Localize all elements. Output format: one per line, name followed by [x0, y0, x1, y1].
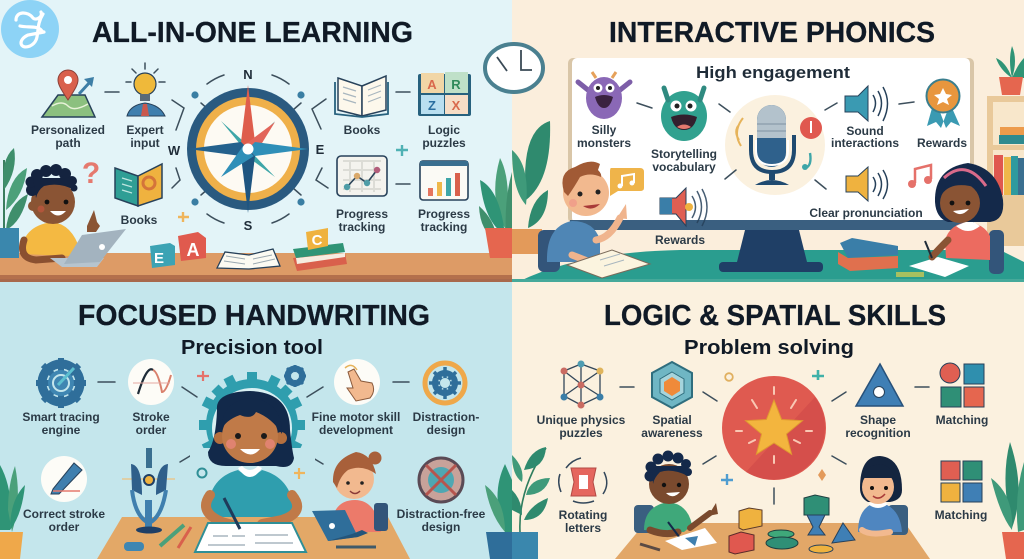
divider strip between rows — [0, 279, 1024, 282]
label: logic puzzles: puzzles — [422, 136, 466, 150]
block E: E — [154, 250, 164, 267]
label: silly monsters: Silly — [592, 123, 617, 137]
connector — [393, 381, 409, 383]
labels: progress tracking: tracking — [339, 220, 385, 234]
label: logic puzzles: Logic — [428, 123, 460, 137]
plant right — [479, 158, 512, 258]
subheading: Problem solving — [684, 337, 854, 359]
plant left — [0, 465, 25, 559]
icon: stroke order — [128, 359, 174, 405]
label: storytelling vocabulary: vocabulary — [652, 160, 716, 174]
icon: logic puzzle book: A — [427, 77, 437, 92]
icon: spatial hexagon — [652, 362, 692, 408]
title: FOCUSED HANDWRITING — [78, 300, 430, 332]
label: unique physics puzzles — [537, 413, 626, 440]
girl writing — [909, 163, 1004, 277]
title: LOGIC & SPATIAL SKILLS — [604, 300, 946, 332]
compass letters — [168, 67, 325, 233]
label: sound interactions: interactions — [831, 136, 899, 150]
label: stroke order — [132, 410, 170, 437]
label: expert input: input — [130, 136, 160, 150]
labels: progress tracking second: tracking — [421, 220, 467, 234]
label: storytelling vocabulary — [651, 147, 717, 174]
label: distraction design: design — [427, 423, 465, 437]
boy with book — [538, 162, 650, 278]
label: expert input: Expert — [126, 123, 164, 137]
book stack — [838, 238, 924, 277]
label: sound interactions: Sound — [846, 124, 884, 138]
icon: pencil circle — [41, 456, 87, 502]
label: rotating letters: Rotating — [559, 508, 607, 522]
connector — [620, 386, 634, 388]
block E — [150, 243, 175, 268]
title: ALL-IN-ONE LEARNING — [92, 17, 413, 49]
notebook table — [97, 517, 410, 559]
table — [615, 523, 930, 559]
bookshelf — [987, 96, 1024, 246]
icon: speaker clear pronunciation — [846, 167, 888, 201]
icon: puzzle matching — [940, 363, 984, 407]
open book on table — [217, 249, 280, 269]
compass letters: W — [168, 143, 181, 158]
microphone centre — [725, 95, 825, 195]
star badge — [722, 376, 826, 480]
label: correct stroke order — [23, 507, 105, 534]
compass letters: N — [243, 67, 253, 82]
girl writing — [206, 391, 297, 526]
labels: progress tracking — [336, 207, 388, 234]
panel: logic and spatial skills — [512, 282, 1024, 559]
label: unique physics puzzles: Unique physics — [537, 413, 626, 427]
pencils and eraser — [124, 525, 191, 551]
label: smart tracing engine: Smart tracing — [22, 410, 100, 424]
icon: open book right — [335, 76, 388, 117]
connectors to centre — [180, 387, 323, 464]
pen — [224, 498, 240, 529]
icon: physics network — [560, 360, 604, 408]
block A: A — [186, 240, 200, 260]
label: rewards: Rewards — [917, 136, 967, 150]
label: expert input — [126, 123, 164, 150]
label: shape recognition: Shape — [860, 413, 896, 427]
label: spatial awareness: Spatial — [652, 413, 692, 427]
connector — [396, 91, 410, 93]
icon: progress line chart — [337, 156, 387, 196]
label: distraction design — [413, 410, 479, 437]
label: logic puzzles — [422, 123, 466, 150]
label: storytelling vocabulary: Storytelling — [651, 147, 717, 161]
panel: focused handwriting — [0, 282, 512, 559]
ring teal — [198, 468, 206, 478]
clock — [485, 44, 543, 92]
small gear blue — [284, 365, 306, 387]
icon: rotating letters — [559, 458, 607, 503]
girl — [858, 456, 908, 535]
label: rotating letters — [559, 508, 607, 535]
label: stroke order: order — [136, 423, 167, 437]
compass letters: S — [244, 218, 253, 233]
plant right — [485, 464, 512, 559]
connectors to star — [703, 392, 846, 504]
plus — [396, 145, 408, 156]
labels: progress tracking: Progress — [336, 207, 388, 221]
icon: distraction gear — [425, 363, 465, 403]
labels: progress tracking second: Progress — [418, 207, 470, 221]
label: smart tracing engine: engine — [42, 423, 81, 437]
label: distraction design: Distraction- — [413, 410, 479, 424]
stacked books and block C — [293, 228, 347, 271]
label: distraction-free design: Distraction-free — [397, 507, 486, 521]
label: correct stroke order: order — [49, 520, 80, 534]
panel: all-in-one learning — [0, 0, 512, 281]
icon: map with pin — [42, 70, 95, 117]
title: INTERACTIVE PHONICS — [609, 17, 935, 49]
label: spatial awareness — [641, 413, 703, 440]
stacked books and block C: C — [312, 232, 323, 249]
icon: silly purple monster — [578, 72, 630, 119]
connector — [899, 102, 914, 104]
icon: pink music note — [908, 165, 932, 188]
icon: puzzle matching two — [941, 461, 982, 502]
label: shape recognition — [845, 413, 911, 440]
plus gold — [294, 468, 305, 479]
icon: hand circle — [334, 359, 380, 405]
label: sound interactions — [831, 124, 899, 150]
label: rotating letters: letters — [565, 521, 601, 535]
label: fine motor skill: Fine motor skill — [312, 410, 400, 424]
icon: open book left — [115, 164, 162, 206]
plant left — [0, 148, 28, 258]
compass — [187, 85, 309, 213]
label: personalized path — [31, 123, 105, 150]
compass corner dots — [191, 91, 305, 206]
ornaments — [721, 370, 826, 485]
label: books left: Books — [121, 213, 158, 227]
monitor screen — [568, 58, 974, 223]
label: silly monsters — [577, 123, 631, 150]
label: personalized path: Personalized — [31, 123, 105, 137]
compass arcs and connectors — [172, 75, 328, 223]
icon: progress bar chart — [420, 161, 468, 200]
blocks — [729, 495, 855, 554]
icon: storytelling teal monster — [661, 88, 707, 141]
notebook — [195, 523, 306, 552]
question mark: ? — [82, 157, 100, 190]
label: smart tracing engine — [22, 410, 100, 437]
plant on shelf — [996, 46, 1024, 95]
icon: logic puzzle book: R — [451, 77, 461, 92]
label: personalized path: path — [55, 136, 81, 150]
icon: logic puzzle book — [418, 72, 471, 116]
connector — [105, 91, 119, 93]
icon: music chat bubble — [610, 168, 644, 196]
icon: speaker rewards — [660, 188, 707, 226]
plus — [178, 212, 189, 222]
subheading: Precision tool — [181, 337, 323, 359]
icon: lightbulb expert — [126, 63, 165, 116]
plant left — [512, 447, 550, 559]
panel: interactive phonics — [485, 0, 1024, 281]
label: distraction-free design: design — [422, 520, 460, 534]
subheading: High engagement — [696, 63, 850, 82]
big teal gear — [190, 372, 315, 482]
plant left — [512, 121, 550, 254]
icon: medal — [926, 80, 960, 128]
icon: logic puzzle book: X — [452, 98, 461, 113]
block A — [178, 232, 206, 261]
label: spatial awareness: awareness — [641, 426, 703, 440]
label: clear pronunciation: Clear pronunciation — [809, 206, 923, 220]
connector — [637, 103, 652, 108]
label: matching: Matching — [936, 413, 988, 427]
label: shape recognition: recognition — [845, 426, 911, 440]
connector — [915, 386, 929, 388]
boy — [634, 450, 718, 550]
table teal — [520, 250, 1024, 281]
compass letters: E — [316, 142, 325, 157]
icon: logic puzzle book: Z — [428, 98, 436, 113]
icon: precision tool — [122, 448, 175, 534]
logo — [1, 0, 59, 58]
label: fine motor skill — [312, 410, 400, 437]
boy at laptop — [21, 164, 126, 267]
icon: smart tracing gear — [36, 358, 86, 408]
connector — [396, 183, 410, 185]
label: rewards: Rewards — [655, 233, 705, 247]
label: unique physics puzzles: puzzles — [559, 426, 603, 440]
label: silly monsters: monsters — [577, 136, 631, 150]
monitor bezel and stand — [570, 220, 974, 272]
connector — [98, 381, 115, 383]
child with laptop — [312, 452, 388, 547]
label: fine motor skill: development — [319, 423, 393, 437]
label: books right: Books — [344, 123, 381, 137]
label: matching two: Matching — [935, 508, 987, 522]
icon: distraction-free sign — [419, 458, 463, 502]
labels: progress tracking second — [418, 207, 470, 234]
plus red — [197, 371, 209, 381]
connectors to microphone — [719, 103, 837, 189]
plant right — [991, 442, 1024, 559]
label: distraction-free design — [397, 507, 486, 534]
table top — [0, 253, 512, 281]
label: correct stroke order: Correct stroke — [23, 507, 105, 521]
icon: speaker sound interactions — [845, 86, 888, 121]
icon: triangle shape — [856, 364, 903, 406]
label: stroke order: Stroke — [132, 410, 170, 424]
